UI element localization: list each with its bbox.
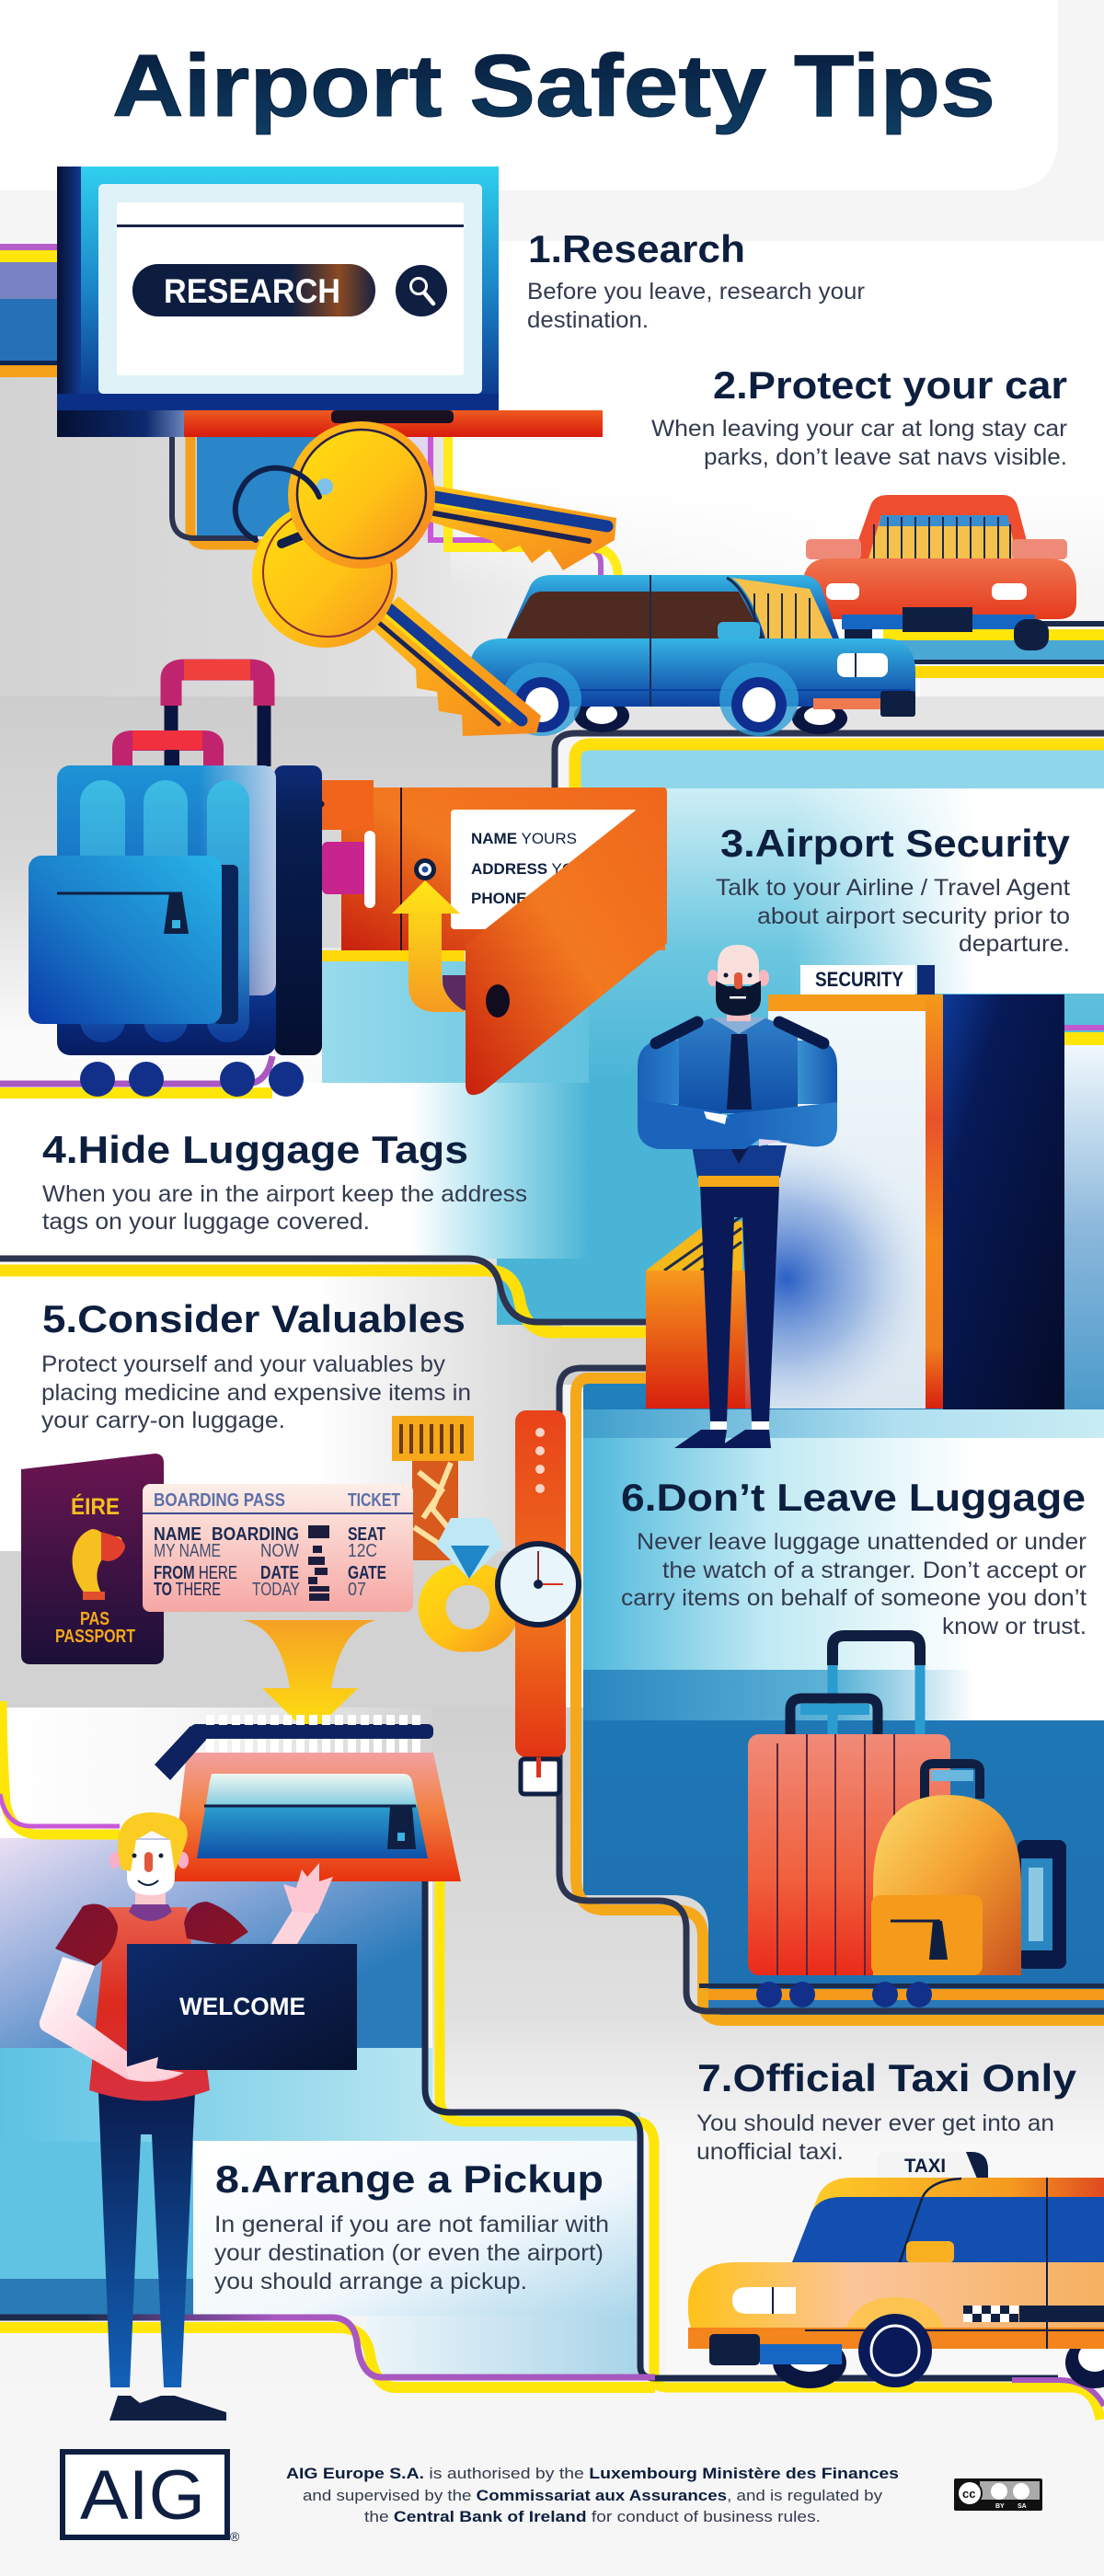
guard waist and belt — [692, 1145, 787, 1178]
key head upper — [288, 421, 435, 569]
tip 5 text: 5.Consider Valuables — [42, 1297, 466, 1340]
box behind guard — [646, 1216, 765, 1409]
icon: keys — [236, 421, 616, 736]
line between tips 4 and 5 — [0, 1259, 646, 1332]
tip 3 text: about airport security prior to — [757, 903, 1070, 929]
address card: PHONE — [471, 890, 526, 907]
icon: security booth — [646, 965, 1064, 1409]
security sign: SECURITY — [815, 968, 903, 991]
car rear wheels — [574, 699, 847, 734]
AIG logo — [63, 2452, 240, 2544]
road right of cars — [883, 621, 1104, 678]
tip 1 text: Before you leave, research your — [527, 279, 865, 305]
guard torso — [678, 1018, 798, 1113]
boarding pass: NOW — [260, 1541, 299, 1561]
left stripes behind monitor — [0, 244, 57, 377]
tip 5 text: Protect yourself and your valuables by — [41, 1351, 446, 1377]
head — [109, 1812, 189, 1921]
tip 1 text: destination. — [527, 307, 649, 333]
legs — [98, 2092, 195, 2387]
creative commons badge: BY — [995, 2503, 1005, 2510]
wheel arch — [842, 2297, 949, 2349]
tip 3 text: departure. — [959, 931, 1070, 957]
tip 2 text — [651, 363, 1067, 470]
shoes — [109, 2396, 226, 2421]
suitcase ribs — [80, 780, 249, 1042]
backpack — [871, 1764, 1021, 1975]
tip 6 text: Never leave luggage unattended or under — [637, 1529, 1087, 1555]
creative commons badge: SA — [1018, 2503, 1027, 2510]
tag flap — [466, 788, 667, 1095]
pink strap — [322, 842, 373, 894]
icon: taxi — [688, 2152, 1104, 2388]
welcome sign — [127, 1944, 357, 2070]
shirt — [89, 1907, 210, 2101]
tip 8 text: your destination (or even the airport) — [214, 2240, 604, 2266]
tip 2 text: When leaving your car at long stay car — [651, 416, 1067, 442]
tip 6 text: know or trust. — [942, 1614, 1087, 1639]
front wheel — [858, 2314, 932, 2387]
search field label: RESEARCH — [164, 272, 340, 310]
boarding pass: TODAY — [252, 1580, 300, 1600]
tip 5 text: placing medicine and expensive items in — [41, 1380, 471, 1406]
address card: NAME YOURS — [471, 830, 577, 847]
guard legs — [700, 1185, 779, 1421]
boarding pass: 12C — [348, 1541, 377, 1561]
icon: computer monitor with research search box — [57, 167, 603, 437]
key ring — [236, 468, 319, 540]
small handle — [122, 741, 213, 766]
key blade lower — [371, 596, 541, 736]
boarding pass: BOARDING — [212, 1524, 299, 1545]
tip 7 text: unofficial taxi. — [696, 2139, 844, 2165]
boarding pass: SEAT — [348, 1524, 385, 1545]
welcome sign: WELCOME — [179, 1993, 305, 2020]
eyelet — [414, 858, 436, 880]
search field — [132, 264, 375, 316]
tip 8 text — [214, 2157, 609, 2294]
taxi body — [688, 2262, 1104, 2349]
AIG logo: AIG — [80, 2456, 205, 2535]
checker stripe — [963, 2306, 1104, 2322]
icon: passport: PASSPORT — [55, 1627, 135, 1647]
tip 4 text: tags on your luggage covered. — [42, 1209, 370, 1235]
icon: luggage tag — [274, 780, 667, 1095]
icon: diamond ring — [419, 1518, 519, 1652]
dark bag — [1018, 1840, 1066, 1969]
boarding pass: DATE — [260, 1563, 299, 1583]
key head lower — [252, 502, 397, 648]
boarding pass: NAME — [154, 1524, 201, 1545]
creative commons badge — [954, 2478, 1042, 2511]
icon: red suitcase and backpack — [748, 1636, 1066, 2007]
tip 1 text: 1.Research — [528, 227, 745, 270]
icon: passport: PAS — [80, 1609, 109, 1629]
tip 4 text — [42, 1128, 527, 1235]
icon: passport — [21, 1454, 164, 1664]
boarding pass: TICKET — [348, 1490, 400, 1511]
hand on sign — [125, 2057, 182, 2080]
connector lines around keys — [172, 437, 618, 580]
boarding pass: 07 — [348, 1580, 366, 1600]
boarding pass: FROM HERE — [154, 1563, 237, 1583]
key blade upper — [430, 486, 616, 570]
shoulders — [55, 1904, 118, 1966]
tip 8 text: you should arrange a pickup. — [214, 2269, 527, 2294]
waving hand — [283, 1863, 333, 1914]
tip 5 text: your carry-on luggage. — [41, 1408, 285, 1433]
big handle — [171, 704, 264, 766]
taxi sign: TAXI — [904, 2156, 946, 2177]
boarding pass: MY NAME — [154, 1541, 221, 1561]
icon: security guard — [638, 945, 837, 1448]
creative commons badge: cc — [962, 2487, 975, 2501]
head — [707, 945, 769, 1021]
right stripes beside security booth — [1064, 1025, 1104, 1409]
taxi rear wheels — [773, 2337, 1104, 2388]
panel: arrange a pickup background — [0, 1701, 1104, 2420]
icon: blue suitcase — [29, 660, 322, 1097]
tip 6 text: the watch of a stranger. Don’t accept or — [662, 1558, 1087, 1583]
line under luggage — [0, 950, 465, 1093]
tie — [727, 1034, 752, 1110]
tip 3 text: 3.Airport Security — [720, 822, 1071, 865]
tip 6 text: carry items on behalf of someone you don’t — [621, 1585, 1087, 1611]
suitcase handles — [833, 1636, 920, 1734]
tip 4 text: When you are in the airport keep the address — [42, 1181, 527, 1207]
clip — [274, 780, 374, 830]
red suitcase body — [748, 1734, 950, 1975]
footer legal text: AIG Europe S.A. is authorised by the Luxembourg Ministère des Finances — [286, 2465, 899, 2482]
barcode — [308, 1525, 329, 1601]
wheels — [756, 1982, 932, 2007]
address card: ADDRESS YOURS — [471, 860, 607, 878]
bumper — [760, 2344, 842, 2364]
icon: blue car — [468, 575, 915, 736]
tip 7 text: You should never ever get into an — [696, 2110, 1054, 2136]
tip 6 text: 6.Don’t Leave Luggage — [621, 1476, 1086, 1519]
collar — [711, 1018, 766, 1034]
wheels — [80, 1062, 304, 1097]
panel: airport security background — [0, 733, 1104, 1325]
icon: magnifying glass — [396, 265, 447, 316]
tip 1 text — [527, 227, 865, 333]
guard arms — [638, 1041, 837, 1149]
tip 7 text — [696, 2056, 1077, 2165]
footer legal text: and supervised by the Commissariat aux Assurances , and is regulated by — [303, 2487, 883, 2504]
tip 7 text: 7.Official Taxi Only — [697, 2056, 1077, 2099]
tip 4 text: 4.Hide Luggage Tags — [42, 1128, 468, 1171]
icon: red car — [802, 495, 1076, 650]
headlight — [732, 2287, 796, 2314]
boarding pass: TO THERE — [154, 1580, 221, 1600]
tip 3 text — [716, 822, 1071, 957]
zipper — [155, 1715, 433, 1780]
arms — [40, 1957, 184, 2082]
arrow pointing up to eyelet — [392, 880, 466, 1012]
address card — [451, 810, 638, 929]
panel: don't leave luggage background — [559, 1368, 1104, 2020]
icon: open bag with zip — [155, 1715, 461, 1881]
title: Airport Safety Tips — [112, 37, 995, 135]
taxi roof — [792, 2178, 1104, 2262]
car front wheels — [502, 662, 799, 736]
tip 8 text: 8.Arrange a Pickup — [215, 2157, 604, 2201]
guard shoes — [674, 1430, 771, 1448]
icon: pill bottle — [392, 1416, 474, 1560]
icon: wrist watch — [498, 1410, 579, 1794]
footer legal text: the Central Bank of Ireland for conduct of business rules. — [364, 2508, 821, 2525]
taxi sign — [877, 2152, 988, 2179]
epaulettes — [656, 1022, 823, 1043]
tip 8 text: In general if you are not familiar with — [214, 2212, 609, 2237]
icon: passport: ÉIRE — [71, 1493, 120, 1520]
boarding pass: GATE — [348, 1563, 386, 1583]
tip 2 text: parks, don’t leave sat navs visible. — [704, 444, 1067, 470]
arrow pointing down — [243, 1620, 376, 1735]
boarding pass — [143, 1484, 413, 1612]
tip 3 text: Talk to your Airline / Travel Agent — [716, 875, 1070, 901]
tip 2 text: 2.Protect your car — [713, 363, 1067, 407]
footer legal text — [286, 2465, 899, 2525]
title panel — [0, 0, 1058, 190]
tip 5 text — [41, 1297, 471, 1433]
pocket — [29, 856, 222, 1024]
tip 6 text — [621, 1476, 1087, 1639]
icon: person holding welcome sign — [40, 1812, 357, 2421]
boarding pass: BOARDING PASS — [154, 1490, 285, 1511]
harp emblem — [73, 1529, 125, 1600]
security sign — [800, 965, 935, 995]
AIG logo: ® — [230, 2529, 240, 2544]
